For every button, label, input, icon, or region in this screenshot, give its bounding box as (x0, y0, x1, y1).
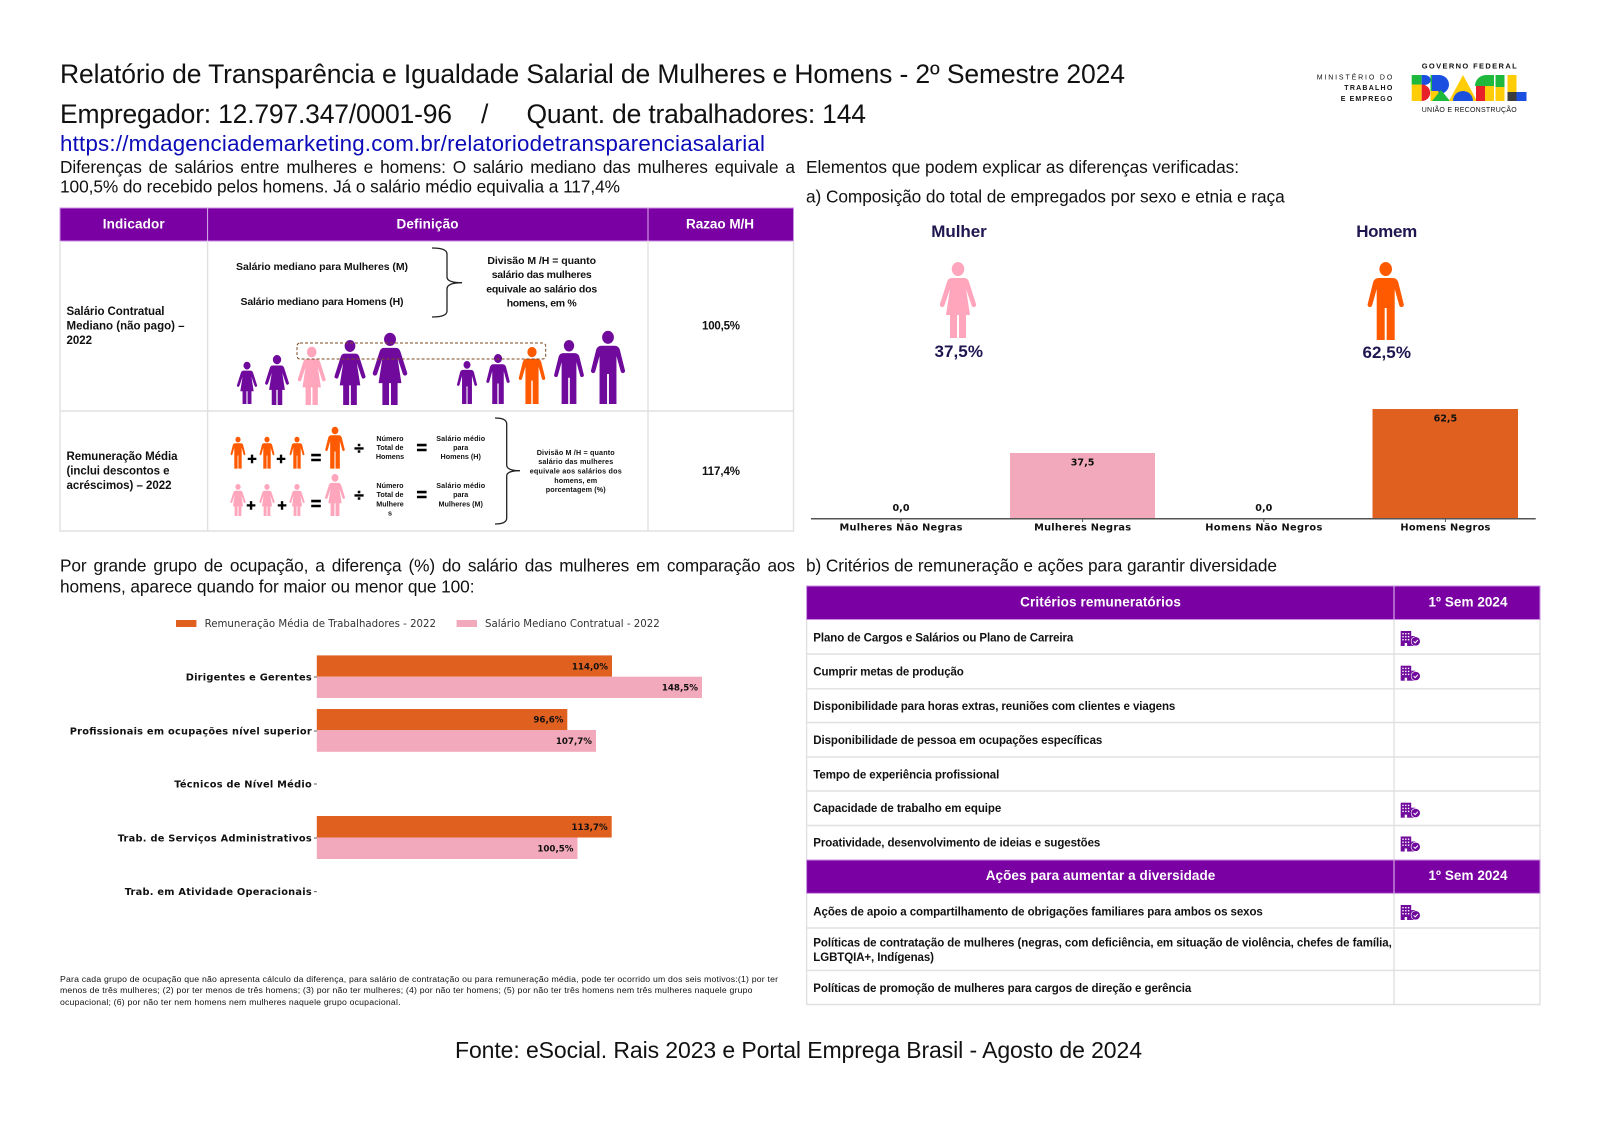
action rows: Políticas de contratação de mulheres (negras, com deficiência, em situação de violência, chefes de família, (813, 937, 1392, 949)
bar chart: composition (811, 409, 1536, 534)
criteria rows: Tempo de experiência profissional (813, 769, 999, 781)
logo: ministério e governo federal: GOVERNO FEDERAL (1422, 61, 1517, 70)
criteria rows (813, 633, 1175, 850)
chart legend (176, 618, 660, 630)
link: https://mdagenciademarketing.com.br/relatoriodetransparenciasalarial (60, 131, 765, 156)
stat: mulher: 37,5% (934, 342, 983, 361)
average formula: women: Mulheres (M) (439, 500, 483, 509)
criteria rows: Cumprir metas de produção (813, 666, 964, 678)
median explanation: salário das mulheres (492, 269, 592, 281)
row label: remuneração média (66, 451, 178, 492)
bars: profissionais (317, 709, 596, 752)
header: ações: 1º Sem 2024 (1428, 868, 1508, 883)
table header: Definição (396, 216, 458, 232)
average explanation: Divisão M /H = quanto (537, 448, 615, 457)
category labels: Técnicos de Nível Médio (174, 778, 312, 790)
average formula: women: = (311, 494, 321, 514)
average formula: men: Número (376, 434, 404, 443)
employer line (60, 99, 866, 129)
value: 117,4%: 117,4% (702, 466, 740, 478)
bars: serviços administrativos: 113,7% (572, 823, 608, 833)
average formula: women: s (388, 509, 392, 518)
grid (807, 620, 1540, 1004)
source: Fonte: eSocial. Rais 2023 e Portal Emprega Brasil - Agosto de 2024 (455, 1037, 1142, 1063)
bar chart: composition: 0,0 (892, 503, 910, 514)
criteria rows: Disponibilidade de pessoa em ocupações específicas (813, 735, 1102, 747)
header: ações (807, 860, 1540, 893)
people line: men (457, 331, 625, 404)
bar chart: composition: 0,0 (1255, 503, 1273, 514)
header: critérios remuneratórios: Critérios remuneratórios (1020, 594, 1181, 610)
paragraph: grande grupo de ocupação (60, 556, 795, 596)
header: critérios remuneratórios (807, 586, 1540, 620)
criteria rows: Proatividade, desenvolvimento de ideias e sugestões (813, 838, 1100, 850)
bars: dirigentes: 114,0% (572, 662, 608, 672)
logo: ministério e governo federal: MINISTÉRIO DO (1317, 72, 1393, 81)
average formula: women: ÷ (354, 486, 364, 505)
median salary labels: Salário mediano para Mulheres (M) (236, 261, 408, 273)
median salary labels (236, 261, 408, 308)
employer line: / (481, 99, 489, 129)
header: critérios remuneratórios: 1º Sem 2024 (1428, 594, 1508, 610)
header: ações: Ações para aumentar a diversidade (986, 868, 1216, 883)
average formula: men: Total de (376, 443, 404, 452)
intro paragraph: diferenças de salários: Diferenças de salários entre mulheres e homens: O salário mediano das mulheres equivale a (60, 157, 795, 177)
stat: mulher (931, 222, 987, 361)
chart legend: Salário Mediano Contratual - 2022 (485, 618, 660, 630)
average explanation: homens, em (554, 476, 597, 485)
category labels: Trab. em Atividade Operacionais (125, 887, 312, 898)
panel: criteria table (807, 586, 1540, 1004)
median explanation: Divisão M /H = quanto (487, 255, 596, 267)
employer line: Empregador: 12.797.347/0001-96 (60, 99, 452, 129)
heading: elementos: Elementos que podem explicar as diferenças verificadas: (806, 157, 1239, 177)
average formula: women (230, 474, 486, 518)
heading: critérios: b) Critérios de remuneração e ações para garantir diversidade (806, 556, 1277, 576)
bars: serviços administrativos: 100,5% (537, 844, 574, 854)
brace (432, 248, 462, 317)
category labels: Trab. de Serviços Administrativos (118, 834, 312, 844)
icon: company check (1401, 836, 1420, 852)
people line: women (237, 333, 407, 405)
average explanation: salário das mulheres (538, 457, 613, 466)
employer line: Quant. de trabalhadores: 144 (526, 99, 866, 129)
stat: homem: 62,5% (1362, 343, 1411, 362)
criteria rows: Disponibilidade para horas extras, reuniões com clientes e viagens (813, 701, 1175, 713)
category labels (70, 672, 317, 898)
bars: dirigentes: 148,5% (662, 684, 698, 694)
table header: Razao M/H (686, 216, 754, 232)
logo: ministério e governo federal: TRABALHO (1344, 85, 1393, 92)
logo: ministério e governo federal: UNIÃO E RECONSTRUÇÃO (1422, 105, 1517, 114)
bars: dirigentes (317, 655, 702, 698)
bar chart: composition: Homens Negros (1400, 523, 1491, 534)
icon: company check (1401, 803, 1420, 818)
icon: company check (1401, 631, 1420, 646)
median explanation: homens, em % (507, 298, 577, 310)
average formula: men: = (311, 448, 321, 468)
row label: remuneração média: acréscimos) – 2022 (66, 480, 172, 492)
title: Relatório de Transparência e Igualdade Salarial de Mulheres e Homens - 2º Semestre 2024 (60, 59, 1125, 89)
brace (495, 418, 520, 524)
average formula: women: para (453, 490, 469, 499)
icon: company check (1401, 905, 1420, 920)
average formula: women: = (416, 485, 427, 505)
average formula: men: + (276, 451, 286, 468)
bars: profissionais: 96,6% (533, 716, 564, 726)
median explanation (486, 255, 597, 310)
average formula: women: Salário médio (436, 481, 486, 490)
chart legend: Remuneração Média de Trabalhadores - 2022 (205, 618, 436, 630)
bar chart: composition: 62,5 (1434, 414, 1457, 425)
average formula: women: Total de (376, 490, 404, 499)
average formula: men: Salário médio (436, 434, 486, 443)
bars: serviços administrativos (317, 816, 612, 859)
average formula: men: Homens (H) (441, 452, 481, 461)
criteria rows: Plano de Cargos e Salários ou Plano de Carreira (813, 633, 1074, 645)
action rows: Ações de apoio a compartilhamento de obrigações familiares para ambos os sexos (813, 906, 1263, 918)
average formula: men: = (416, 438, 427, 458)
row label: salário contratual: Salário Contratual (66, 306, 164, 318)
average explanation (530, 448, 622, 494)
average formula: men: para (453, 443, 469, 452)
bar chart: composition: 37,5 (1071, 458, 1094, 469)
paragraph: grande grupo de ocupação: homens, aparece quando for maior ou menor que 100: (60, 576, 474, 596)
intro paragraph: diferenças de salários (60, 157, 795, 197)
panel: indicator table (60, 208, 794, 531)
intro paragraph: diferenças de salários: 100,5% do recebido pelos homens. Já o salário médio equivalia a 117,4% (60, 177, 620, 197)
dashed median highlight (297, 343, 546, 359)
table grid (60, 241, 794, 531)
bar chart: composition: Homens Não Negros (1205, 523, 1322, 534)
bar chart: composition: Mulheres Negras (1034, 523, 1131, 534)
average formula: women: + (277, 498, 287, 514)
logo: ministério e governo federal (1317, 61, 1526, 114)
average formula: women: Número (376, 481, 404, 490)
median explanation: equivale ao salário dos (486, 284, 597, 296)
footnote: menos de três mulheres; (2) por ter menos de três homens; (3) por não ter mulheres; (4) por não ter homens; (5) por não ter três homens nem três mulheres naquele grupo (60, 985, 753, 995)
row label: salário contratual: Mediano (não pago) – (66, 321, 185, 333)
stat: homem: Homem (1356, 222, 1417, 241)
average formula: women: Mulhere (376, 500, 404, 509)
average formula: women: + (246, 498, 256, 514)
table header (60, 208, 794, 241)
median salary labels: Salário mediano para Homens (H) (240, 296, 404, 308)
value: 100,5%: 100,5% (702, 321, 740, 333)
average explanation: equivale aos salários dos (530, 467, 622, 476)
category labels: Dirigentes e Gerentes (186, 672, 312, 684)
footnote: Para cada grupo de ocupação que não apresenta cálculo da diferença, para salário de contratação ou para remuneração média, pode ter ocorrido um dos seis motivos:(1) por ter (60, 974, 778, 984)
row label: salário contratual: 2022 (66, 335, 92, 347)
criteria rows: Capacidade de trabalho em equipe (813, 803, 1001, 815)
average formula: men: + (247, 451, 257, 468)
row label: remuneração média: Remuneração Média (66, 451, 178, 463)
average formula: men: Homens (376, 452, 404, 461)
stat: mulher: Mulher (931, 222, 987, 241)
logo: ministério e governo federal: E EMPREGO (1341, 96, 1393, 103)
average formula: men (231, 427, 486, 469)
icon: company check (1401, 666, 1420, 681)
average explanation: porcentagem (%) (546, 485, 606, 494)
row label: remuneração média: (inclui descontos e (66, 466, 170, 478)
action rows: LGBTQIA+, Indígenas) (813, 952, 934, 964)
table header: Indicador (103, 216, 165, 232)
bar chart: composition: Mulheres Não Negras (840, 523, 963, 534)
category labels: Profissionais em ocupações nível superior (70, 726, 312, 738)
paragraph: grande grupo de ocupação: Por grande grupo de ocupação, a diferença (%) do salário das mulheres em comparação aos (60, 556, 795, 576)
average formula: men: ÷ (354, 439, 364, 458)
bar chart: occupation groups (70, 655, 702, 898)
bars: profissionais: 107,7% (556, 737, 592, 747)
footnote: ocupacional; (6) por não ter nem homens nem mulheres naquele grupo ocupacional. (60, 997, 400, 1007)
row label: salário contratual (66, 306, 185, 347)
heading: composição: a) Composição do total de empregados por sexo e etnia e raça (806, 187, 1285, 207)
action rows: Políticas de promoção de mulheres para cargos de direção e gerência (813, 983, 1192, 995)
footnote (60, 974, 778, 1007)
action rows (813, 906, 1392, 995)
stat: homem (1356, 222, 1417, 362)
